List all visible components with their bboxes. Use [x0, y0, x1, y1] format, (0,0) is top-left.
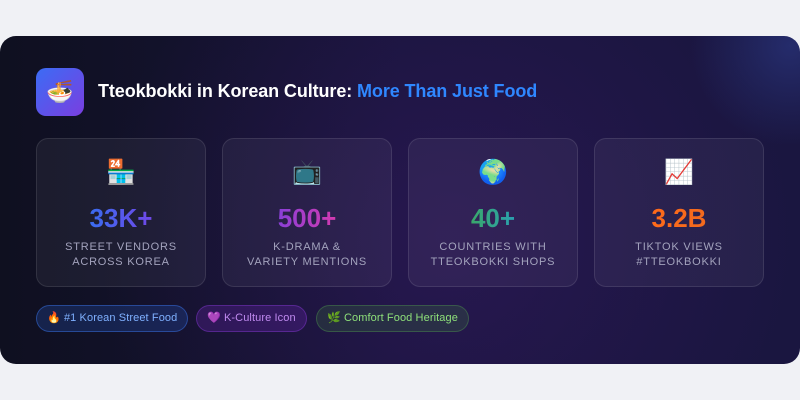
title: Tteokbokki in Korean Culture: More Than Just Food	[98, 81, 537, 101]
stat card: countries: 🌍	[478, 159, 508, 186]
stat card: tiktok: #TTEOKBOKKI	[636, 256, 722, 268]
stat card: k-drama: VARIETY MENTIONS	[247, 256, 367, 268]
stat card: countries: 40+	[471, 203, 515, 233]
stat card: street vendors: STREET VENDORS	[65, 241, 177, 253]
icon: noodle bowl logo: 🍜	[46, 79, 74, 104]
stat card: countries: COUNTRIES WITH	[439, 241, 547, 253]
stat card: k-drama: 500+	[278, 203, 336, 233]
tag: street food	[36, 305, 188, 332]
tag: k-culture	[196, 305, 307, 332]
stat card: tiktok	[594, 138, 764, 287]
stat card: tiktok: 📈	[664, 159, 694, 186]
stat card: tiktok: 3.2B	[652, 203, 706, 233]
tag: comfort food: 🌿 Comfort Food Heritage	[327, 312, 458, 324]
stat card: k-drama: K-DRAMA &	[273, 241, 341, 253]
tag: k-culture: 💜 K-Culture Icon	[207, 312, 296, 324]
tag: comfort food	[316, 305, 469, 332]
stat card: street vendors: 33K+	[90, 203, 152, 233]
icon: noodle bowl logo	[36, 68, 84, 116]
stat card: street vendors: ACROSS KOREA	[72, 256, 170, 268]
stat card: street vendors	[36, 138, 206, 287]
stat card: k-drama: 📺	[292, 159, 322, 186]
stat card: countries	[408, 138, 578, 287]
stat card: k-drama	[222, 138, 392, 287]
stat card: tiktok: TIKTOK VIEWS	[635, 241, 723, 253]
stat card: street vendors: 🏪	[106, 159, 136, 186]
tag: street food: 🔥 #1 Korean Street Food	[47, 312, 177, 324]
stat card: countries: TTEOKBOKKI SHOPS	[431, 256, 555, 268]
